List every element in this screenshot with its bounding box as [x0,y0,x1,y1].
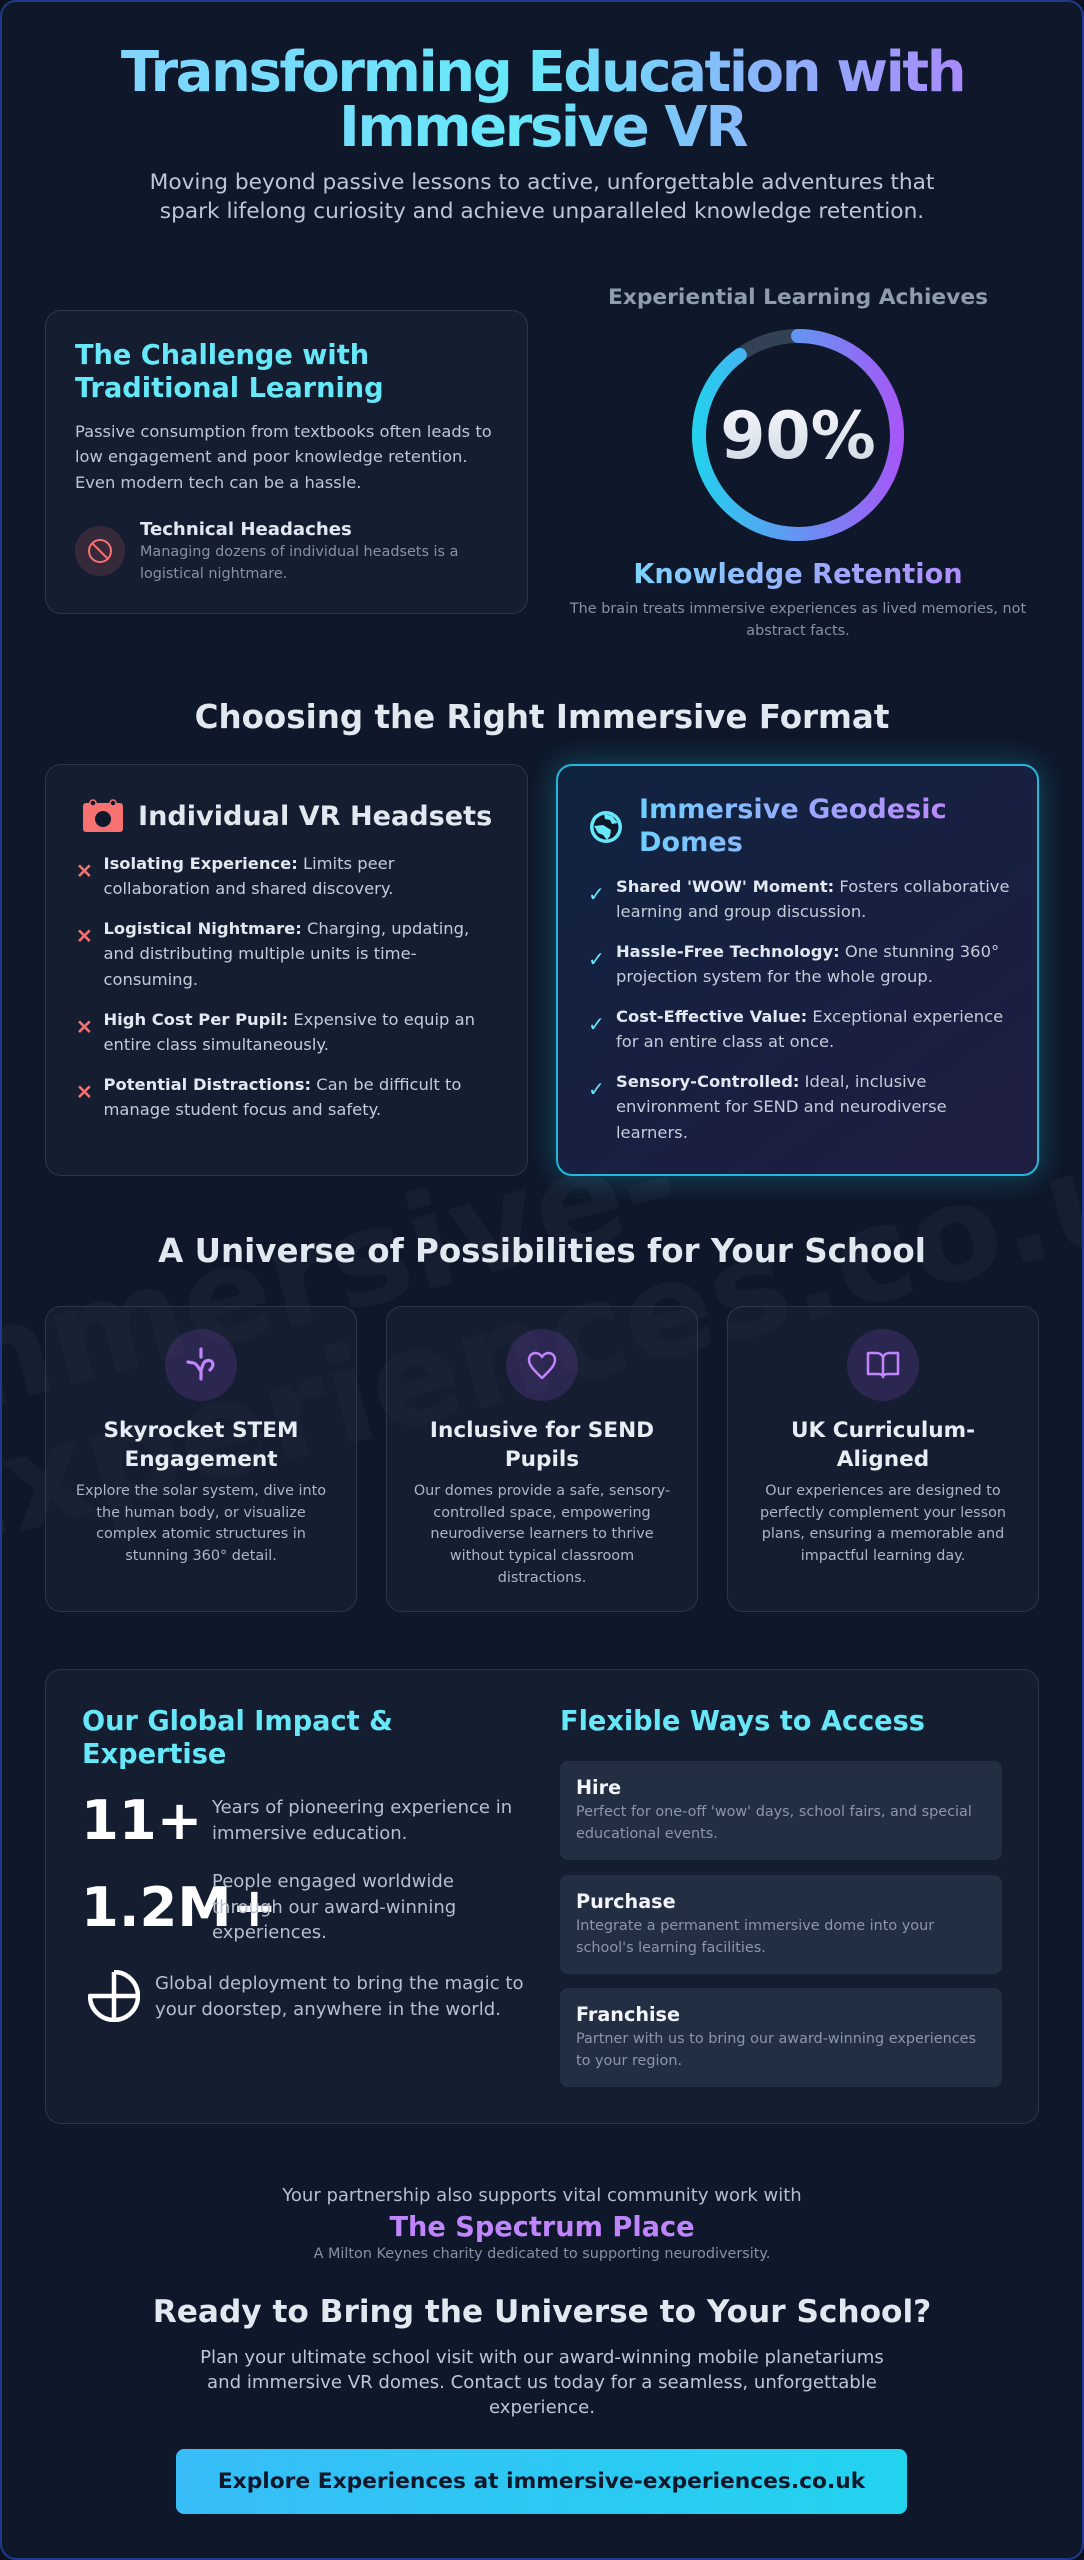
impact heading [82,1706,393,1770]
headset item 2: and distributing multiple units is time- [104,944,417,963]
charity name: The Spectrum Place [389,2212,695,2243]
technical headaches title: Technical Headaches [140,519,352,540]
technical headaches text: Managing dozens of individual headsets is a [140,544,458,560]
access option: franchise [560,1988,1002,2087]
hire text: educational events. [576,1826,718,1842]
STEM text: complex atomic structures in [96,1526,306,1542]
stat text: years: Years of pioneering experience in [212,1797,512,1818]
SEND heading: Pupils [505,1447,579,1472]
heading: call to action: Ready to Bring the Universe to Your School? [153,2294,931,2330]
dome item 4 [588,1072,947,1142]
dome item 2 [588,942,999,986]
curriculum text [760,1483,1006,1564]
icon: open book [847,1329,919,1401]
challenge heading: Traditional Learning [75,372,384,404]
headset item 2 [76,919,469,989]
icon: heart [506,1329,578,1401]
impact heading: Our Global Impact & [82,1706,393,1737]
panel: SEND [386,1306,698,1612]
title [46,45,1039,155]
knowledge retention label: Knowledge Retention [633,559,963,590]
partnership line: Your partnership also supports vital community work with [282,2185,802,2206]
impact heading: Expertise [82,1738,226,1770]
dome item 3: for an entire class at once. [616,1032,834,1051]
icon: globe [590,811,622,843]
button: Explore Experiences at immersive-experiences.co.uk [218,2469,865,2494]
domes heading: Domes [639,827,743,858]
hire title: Hire [576,1776,621,1799]
call to action text: and immersive VR domes. Contact us today for a seamless, unforgettable [207,2372,877,2393]
stat label: Experiential Learning Achieves [608,285,988,310]
stat text: people [212,1871,456,1943]
headset item 4 [76,1075,461,1119]
stat text: years [212,1797,512,1844]
dome item 4: Sensory-Controlled: Ideal, inclusive [616,1072,926,1091]
call to action text: experience. [489,2397,595,2418]
dome item 1 [588,877,1010,921]
dome item 1: learning and group discussion. [616,902,866,921]
stat: 11+: 11+ [81,1789,202,1852]
icon: global deployment [88,1970,140,2022]
call to action text: Plan your ultimate school visit with our award-winning mobile planetariums [200,2347,884,2368]
STEM text: Explore the solar system, dive into [76,1483,326,1499]
franchise text: Partner with us to bring our award-winning experiences [576,2031,976,2047]
dome item 1: Shared 'WOW' Moment: Fosters collaborative [616,877,1010,896]
panel: curriculum [727,1306,1039,1612]
dome item 2: Hassle-Free Technology: One stunning 360° [616,942,999,961]
curriculum text: Our experiences are designed to [765,1483,1001,1499]
SEND heading: Inclusive for SEND [430,1418,654,1443]
access heading: Flexible Ways to Access [560,1706,925,1737]
stat text: people: experiences. [212,1922,327,1943]
curriculum heading: Aligned [837,1447,929,1472]
dome item 1: ✓ [588,882,605,906]
headset item 1 [76,854,394,898]
stat description: abstract facts. [746,623,850,639]
charity description: A Milton Keynes charity dedicated to supporting neurodiversity. [314,2246,770,2262]
dome item 3 [588,1007,1003,1051]
stat: 1.2M+: 1.2M+ [81,1876,277,1939]
panel: VR headsets [45,764,528,1176]
icon: ban [75,526,125,576]
purchase text: Integrate a permanent immersive dome into your [576,1918,934,1934]
curriculum text: perfectly complement your lesson [760,1505,1006,1521]
dome item 2: projection system for the whole group. [616,967,933,986]
access option: hire [560,1761,1002,1860]
domes heading: Immersive Geodesic [639,794,947,825]
heading: universe of possibilities: A Universe of Possibilities for Your School [158,1232,926,1270]
access option: purchase [560,1875,1002,1974]
button [176,2449,907,2514]
franchise text [576,2031,976,2069]
icon: STEM rocket [165,1329,237,1401]
stat text: years: immersive education. [212,1822,407,1844]
subtitle: Moving beyond passive lessons to active, unforgettable adventures that [150,170,934,195]
headset item 2: Logistical Nightmare: Charging, updating, [104,919,469,938]
panel: geodesic domes [556,764,1039,1176]
dome item 4: ✓ [588,1077,605,1101]
challenge body text: Passive consumption from textbooks often leads to [75,422,492,441]
stat text: people: through our award-winning [212,1896,456,1918]
SEND text: controlled space, empowering [433,1505,651,1521]
STEM text: stunning 360° detail. [125,1548,277,1564]
stat text: people: People engaged worldwide [212,1871,454,1892]
headset item 3: entire class simultaneously. [104,1035,329,1054]
headset item 4: Potential Distractions: Can be difficult to [104,1075,461,1094]
title: Immersive VR [339,95,746,160]
headset item 4: ✕ [76,1080,93,1104]
deployment text: Global deployment to bring the magic to [155,1973,524,1994]
SEND text: Our domes provide a safe, sensory- [414,1483,670,1499]
headset item 1: ✕ [76,859,93,883]
headset item 4: manage student focus and safety. [104,1100,381,1119]
panel: STEM [45,1306,357,1612]
curriculum heading [791,1418,975,1472]
SEND text: distractions. [498,1570,586,1586]
chart: 90 percent ring: 90% [720,399,876,474]
franchise title: Franchise [576,2003,680,2026]
challenge heading [75,340,384,404]
icon: camera [83,799,123,832]
headset item 3: ✕ [76,1015,93,1039]
headset item 2: ✕ [76,924,93,948]
curriculum text: plans, ensuring a memorable and [762,1526,1004,1542]
purchase text: school's learning facilities. [576,1940,766,1956]
stat description [570,601,1026,639]
heading: choosing format: Choosing the Right Immersive Format [195,698,889,736]
SEND heading [430,1418,654,1472]
deployment text: your doorstep, anywhere in the world. [155,1998,501,2020]
STEM heading: Skyrocket STEM [103,1418,299,1443]
call to action text [200,2347,884,2418]
STEM heading: Engagement [124,1447,278,1472]
headsets heading: Individual VR Headsets [138,801,492,832]
hire text: Perfect for one-off 'wow' days, school fairs, and special [576,1804,972,1820]
headset item 1: Isolating Experience: Limits peer [104,854,394,873]
purchase text [576,1918,934,1956]
dome item 4: environment for SEND and neurodiverse [616,1097,947,1116]
SEND text: without typical classroom [450,1548,634,1564]
challenge body text [75,422,492,492]
dome item 3: Cost-Effective Value: Exceptional experience [616,1007,1003,1026]
title: Transforming Education with [121,40,964,105]
deployment text [155,1973,524,2020]
hire text [576,1804,972,1842]
domes heading [639,793,959,859]
headset item 1: collaboration and shared discovery. [104,879,393,898]
subtitle [150,170,934,224]
panel: impact and access [45,1669,1039,2124]
challenge body text: Even modern tech can be a hassle. [75,473,361,492]
challenge heading: The Challenge with [75,340,369,371]
STEM heading [103,1418,299,1472]
dome item 4: learners. [616,1123,688,1142]
headset item 3: High Cost Per Pupil: Expensive to equip an [104,1010,475,1029]
challenge body text: low engagement and poor knowledge retention. [75,447,468,466]
headset item 2: consuming. [104,970,198,989]
purchase title: Purchase [576,1890,676,1913]
franchise text: to your region. [576,2053,682,2069]
SEND text: neurodiverse learners to thrive [430,1526,654,1542]
SEND text [414,1483,670,1586]
panel: the challenge [45,310,528,614]
STEM text [76,1483,326,1564]
dome item 2: ✓ [588,947,605,971]
stat description: The brain treats immersive experiences as lived memories, not [570,601,1026,617]
technical headaches text: logistical nightmare. [140,566,287,582]
subtitle: spark lifelong curiosity and achieve unparalleled knowledge retention. [160,198,924,224]
dome item 3: ✓ [588,1012,605,1036]
headset item 3 [76,1010,475,1054]
curriculum heading: UK Curriculum- [791,1418,975,1443]
curriculum text: impactful learning day. [801,1548,965,1564]
STEM text: the human body, or visualize [96,1505,306,1521]
chart: 90 percent ring [692,329,904,541]
technical headaches text [140,544,458,582]
